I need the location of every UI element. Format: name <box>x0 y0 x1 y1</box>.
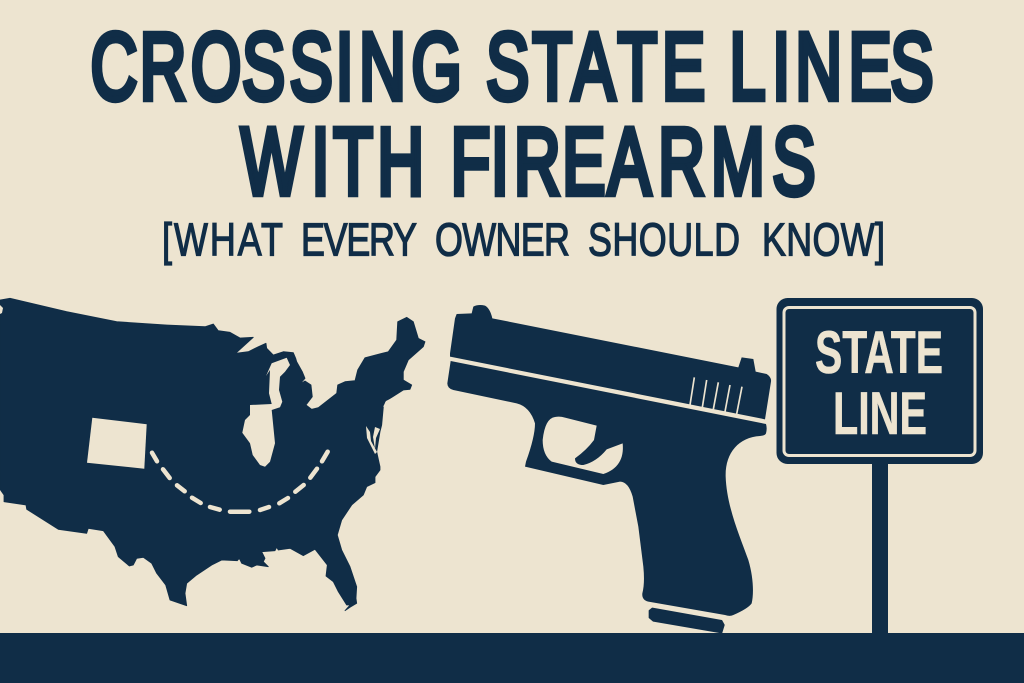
map: United States silhouette <box>0 298 425 611</box>
sign panel <box>776 298 983 464</box>
slide serrations <box>690 377 742 414</box>
subtitle: EVERY <box>301 214 417 266</box>
gun slide <box>450 305 771 419</box>
title <box>91 14 933 215</box>
title: CROSSING STATE LINES <box>91 14 933 120</box>
sign inner border <box>784 308 975 456</box>
icon: handgun <box>447 305 771 633</box>
Chesapeake Bay <box>366 426 380 454</box>
gun frame and grip <box>447 361 767 616</box>
subtitle <box>162 214 885 266</box>
highlighted state: Illinois and Lake Michigan <box>242 358 290 467</box>
subtitle: OWNER <box>435 214 570 266</box>
sign post <box>872 460 888 636</box>
trigger guard opening <box>543 417 623 474</box>
sign text: STATE <box>815 319 943 386</box>
map landmass <box>0 298 425 611</box>
Long Island <box>383 396 397 407</box>
subtitle: KNOW] <box>762 214 885 266</box>
left coast notch <box>0 305 3 314</box>
title: WITH FIREARMS <box>241 109 816 215</box>
magazine base <box>649 608 724 633</box>
state line sign <box>776 298 983 464</box>
dashed travel route <box>152 452 328 512</box>
highlighted state: origin <box>87 418 147 469</box>
subtitle: SHOULD <box>588 214 740 266</box>
sign text: LINE <box>833 380 927 447</box>
subtitle: [WHAT <box>162 214 283 266</box>
sign text <box>815 319 943 447</box>
ground band <box>0 633 1024 683</box>
